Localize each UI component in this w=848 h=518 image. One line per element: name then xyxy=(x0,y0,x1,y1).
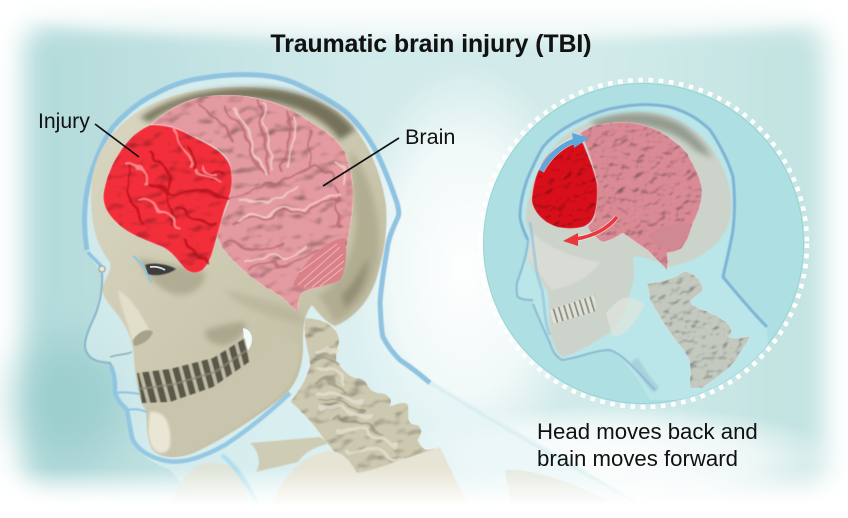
leader line: brain xyxy=(323,138,399,186)
title: Traumatic brain injury (TBI) xyxy=(270,31,592,58)
leader line: injury xyxy=(95,124,139,157)
inset head outline xyxy=(520,105,767,327)
label: injury: Injury xyxy=(38,110,90,133)
arrow: red xyxy=(563,217,617,246)
skull xyxy=(91,87,386,457)
arrow: blue xyxy=(541,133,589,171)
inset head xyxy=(517,105,770,400)
neck spine xyxy=(290,318,440,508)
inset spine xyxy=(647,271,750,388)
inset face outline xyxy=(517,240,655,390)
brain: healthy region xyxy=(150,95,354,313)
main head silhouette xyxy=(85,75,640,505)
face bone shading xyxy=(118,290,305,350)
dotted ring xyxy=(480,80,807,407)
teeth xyxy=(137,330,300,456)
caption: brain moves forward xyxy=(537,446,738,471)
caption: Head moves back and xyxy=(537,419,758,444)
face outline xyxy=(85,252,290,505)
brain main xyxy=(103,95,354,313)
cerebellum xyxy=(293,238,346,287)
brain: sulci xyxy=(198,100,347,270)
eye socket xyxy=(133,256,205,295)
inset cerebellum xyxy=(650,223,691,250)
bottom fade xyxy=(0,468,848,506)
label: brain: Brain xyxy=(405,124,455,149)
brain: injury region xyxy=(103,125,232,273)
inset neck lines xyxy=(634,360,657,390)
injury sulci xyxy=(125,132,228,265)
inset brain xyxy=(580,122,702,270)
shoulder bones xyxy=(170,437,625,510)
inset injury xyxy=(532,141,597,228)
inset teeth xyxy=(550,295,596,324)
inset circle xyxy=(480,80,807,407)
